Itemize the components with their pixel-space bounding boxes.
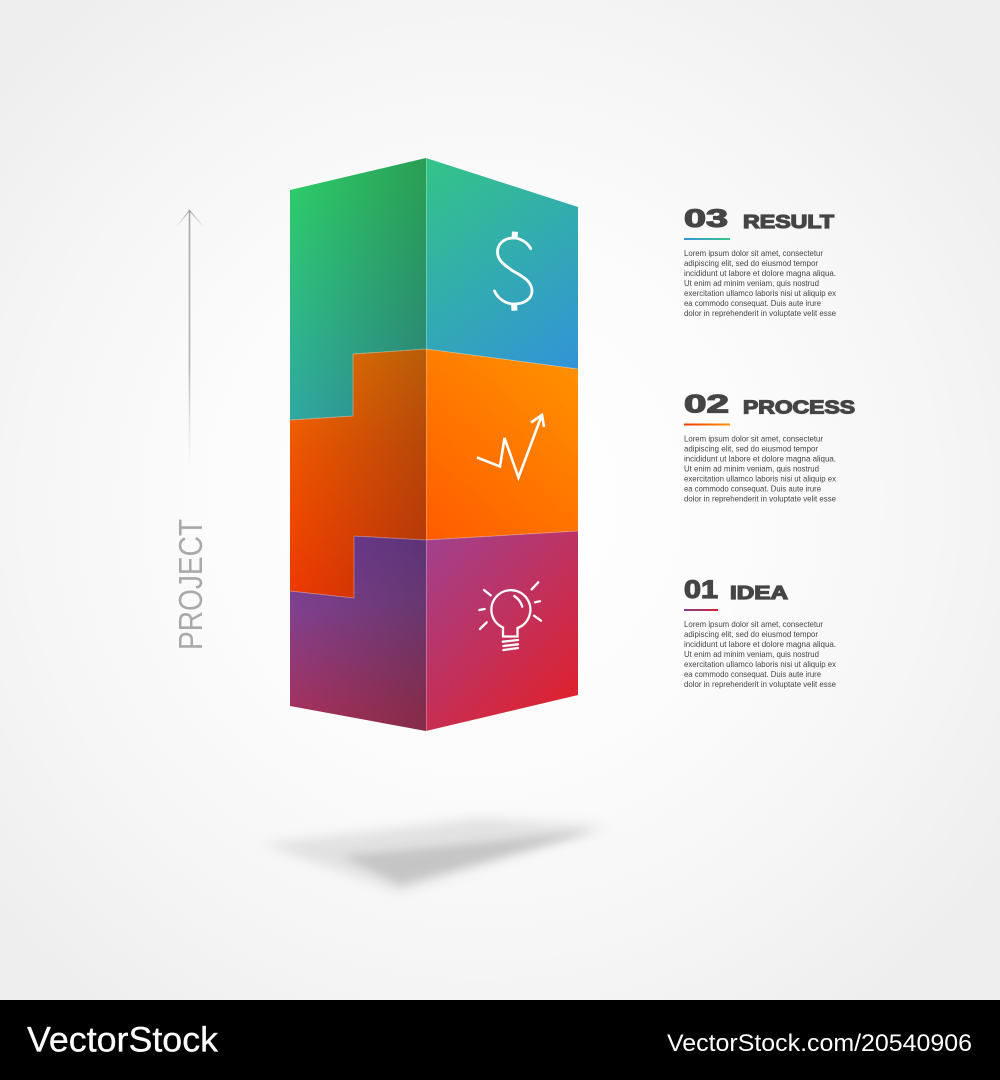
axis arrow	[177, 210, 203, 472]
floor shadow	[262, 818, 610, 892]
body text: incididunt ut labore et dolore magna aliqua.	[684, 268, 836, 278]
body text: Lorem ipsum dolor sit amet, consectetur	[684, 248, 823, 258]
section 03: result	[684, 205, 837, 318]
axis label: project: PROJECT	[172, 519, 209, 650]
footer logo: VectorStock	[27, 1020, 219, 1060]
heading: 01	[684, 576, 718, 604]
heading: PROCESS	[743, 398, 855, 418]
block 02: process (orange)	[290, 349, 578, 598]
body text: incididunt ut labore et dolore magna aliqua.	[684, 639, 836, 649]
footer url: VectorStock.com/20540906	[667, 1030, 972, 1057]
body text: Ut enim ad minim veniam, quis nostrud	[684, 464, 819, 474]
body text	[684, 248, 837, 318]
body text: dolor in reprehenderit in voluptate velit esse	[684, 679, 836, 689]
underline	[684, 238, 730, 240]
body text: ea commodo consequat. Duis aute irure	[684, 298, 821, 308]
body text: dolor in reprehenderit in voluptate velit esse	[684, 308, 836, 318]
block 03: result (green)	[290, 158, 578, 420]
block edge highlights	[290, 158, 578, 731]
heading: RESULT	[743, 212, 834, 232]
body text: exercitation ullamco laboris nisi ut aliquip ex	[684, 288, 837, 298]
body text: Lorem ipsum dolor sit amet, consectetur	[684, 619, 823, 629]
footer bar	[0, 1000, 1000, 1080]
body text: Lorem ipsum dolor sit amet, consectetur	[684, 434, 823, 444]
body text	[684, 619, 837, 689]
column	[290, 158, 578, 731]
body text	[684, 434, 837, 504]
section 01: idea	[684, 576, 837, 689]
body text: exercitation ullamco laboris nisi ut aliquip ex	[684, 474, 837, 484]
body text: incididunt ut labore et dolore magna aliqua.	[684, 454, 836, 464]
heading	[684, 390, 855, 418]
body text: adipiscing elit, sed do eiusmod tempor	[684, 629, 818, 639]
body text: ea commodo consequat. Duis aute irure	[684, 484, 821, 494]
section 02: process	[684, 390, 855, 504]
heading: IDEA	[730, 583, 788, 603]
icon: light bulb	[479, 582, 541, 650]
body text: adipiscing elit, sed do eiusmod tempor	[684, 258, 818, 268]
underline	[684, 609, 718, 611]
heading	[684, 576, 788, 604]
heading: 02	[684, 390, 729, 418]
body text: exercitation ullamco laboris nisi ut aliquip ex	[684, 659, 837, 669]
body text: Ut enim ad minim veniam, quis nostrud	[684, 649, 819, 659]
icon: rising chart arrow	[477, 415, 544, 478]
block 01: idea (purple)	[290, 531, 578, 731]
underline	[684, 424, 730, 426]
heading	[684, 205, 834, 233]
body text: adipiscing elit, sed do eiusmod tempor	[684, 444, 818, 454]
icon: dollar	[494, 232, 532, 311]
body text: ea commodo consequat. Duis aute irure	[684, 669, 821, 679]
heading: 03	[684, 205, 728, 233]
body text: Ut enim ad minim veniam, quis nostrud	[684, 278, 819, 288]
body text: dolor in reprehenderit in voluptate velit esse	[684, 494, 836, 504]
